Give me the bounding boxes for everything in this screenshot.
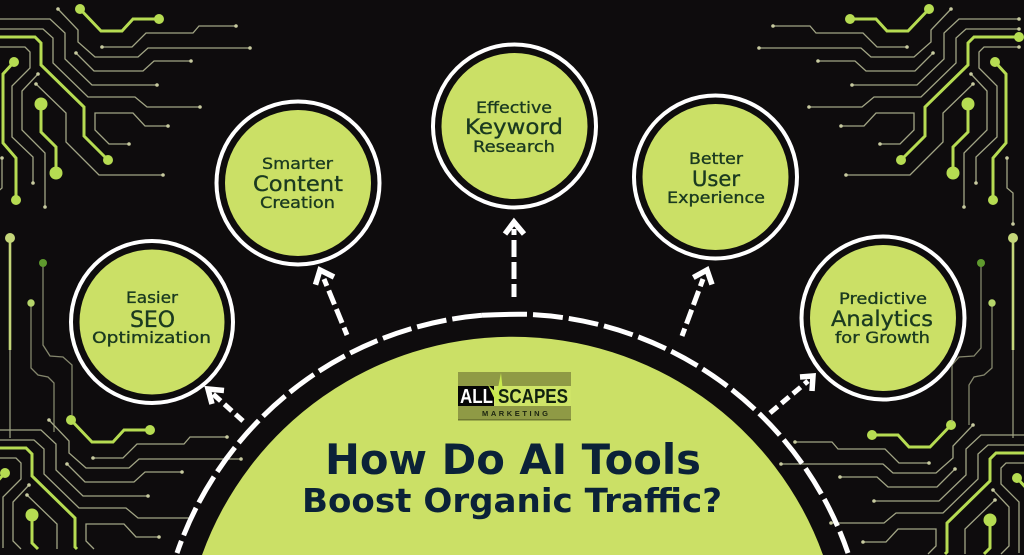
arrow: to keyword bbox=[505, 222, 524, 297]
arrow: to analytics bbox=[770, 376, 813, 413]
arrow: to content bbox=[316, 270, 347, 335]
circle: Easier SEO Optimization: Easier bbox=[126, 288, 178, 307]
circle: Predictive Analytics for Growth: Predictive bbox=[839, 289, 927, 308]
circle: Better User Experience bbox=[634, 96, 797, 258]
circle: Predictive Analytics for Growth: for Growth bbox=[835, 328, 930, 347]
logo: All Scapes Marketing bbox=[458, 372, 571, 420]
vertical circuit traces: left bbox=[5, 233, 72, 438]
logo: All Scapes Marketing: SCAPES bbox=[498, 386, 568, 408]
circuit pattern: bottom left bbox=[0, 415, 243, 549]
circle: Smarter Content Creation: Smarter bbox=[262, 154, 333, 173]
circle: Better User Experience: Experience bbox=[667, 188, 765, 207]
circuit pattern: top right bbox=[757, 4, 1024, 226]
dome: central semicircle bbox=[202, 337, 823, 555]
title: How Do AI Tools bbox=[325, 435, 701, 484]
circuit pattern: bottom right bbox=[779, 420, 1024, 554]
circle: Effective Keyword Research bbox=[433, 44, 596, 208]
vertical circuit traces: right bbox=[952, 233, 1018, 438]
circle: Smarter Content Creation: Creation bbox=[260, 193, 335, 212]
arrow: to user experience bbox=[682, 270, 712, 336]
circle: Effective Keyword Research: Effective bbox=[476, 98, 552, 117]
circle: Smarter Content Creation bbox=[216, 102, 380, 264]
title: Boost Organic Traffic? bbox=[302, 481, 722, 520]
circle: Predictive Analytics for Growth bbox=[802, 236, 964, 400]
circle: Better User Experience: User bbox=[692, 167, 740, 191]
circuit pattern: top left bbox=[0, 4, 252, 226]
circle: Easier SEO Optimization: SEO bbox=[130, 308, 175, 333]
logo: All Scapes Marketing: MARKETING bbox=[482, 409, 548, 418]
circle: Effective Keyword Research: Research bbox=[473, 137, 555, 156]
title bbox=[302, 435, 722, 520]
circle: Smarter Content Creation: Content bbox=[253, 172, 343, 196]
circle: Effective Keyword Research: Keyword bbox=[465, 115, 563, 139]
circle: Better User Experience: Better bbox=[689, 149, 743, 168]
logo: All Scapes Marketing: ALL bbox=[460, 386, 493, 408]
dashed arc around dome bbox=[177, 314, 848, 553]
circle: Predictive Analytics for Growth: Analytics bbox=[831, 307, 933, 331]
circle: Easier SEO Optimization bbox=[71, 241, 233, 403]
circle: Easier SEO Optimization: Optimization bbox=[92, 328, 211, 347]
arrow: to SEO bbox=[208, 389, 243, 421]
